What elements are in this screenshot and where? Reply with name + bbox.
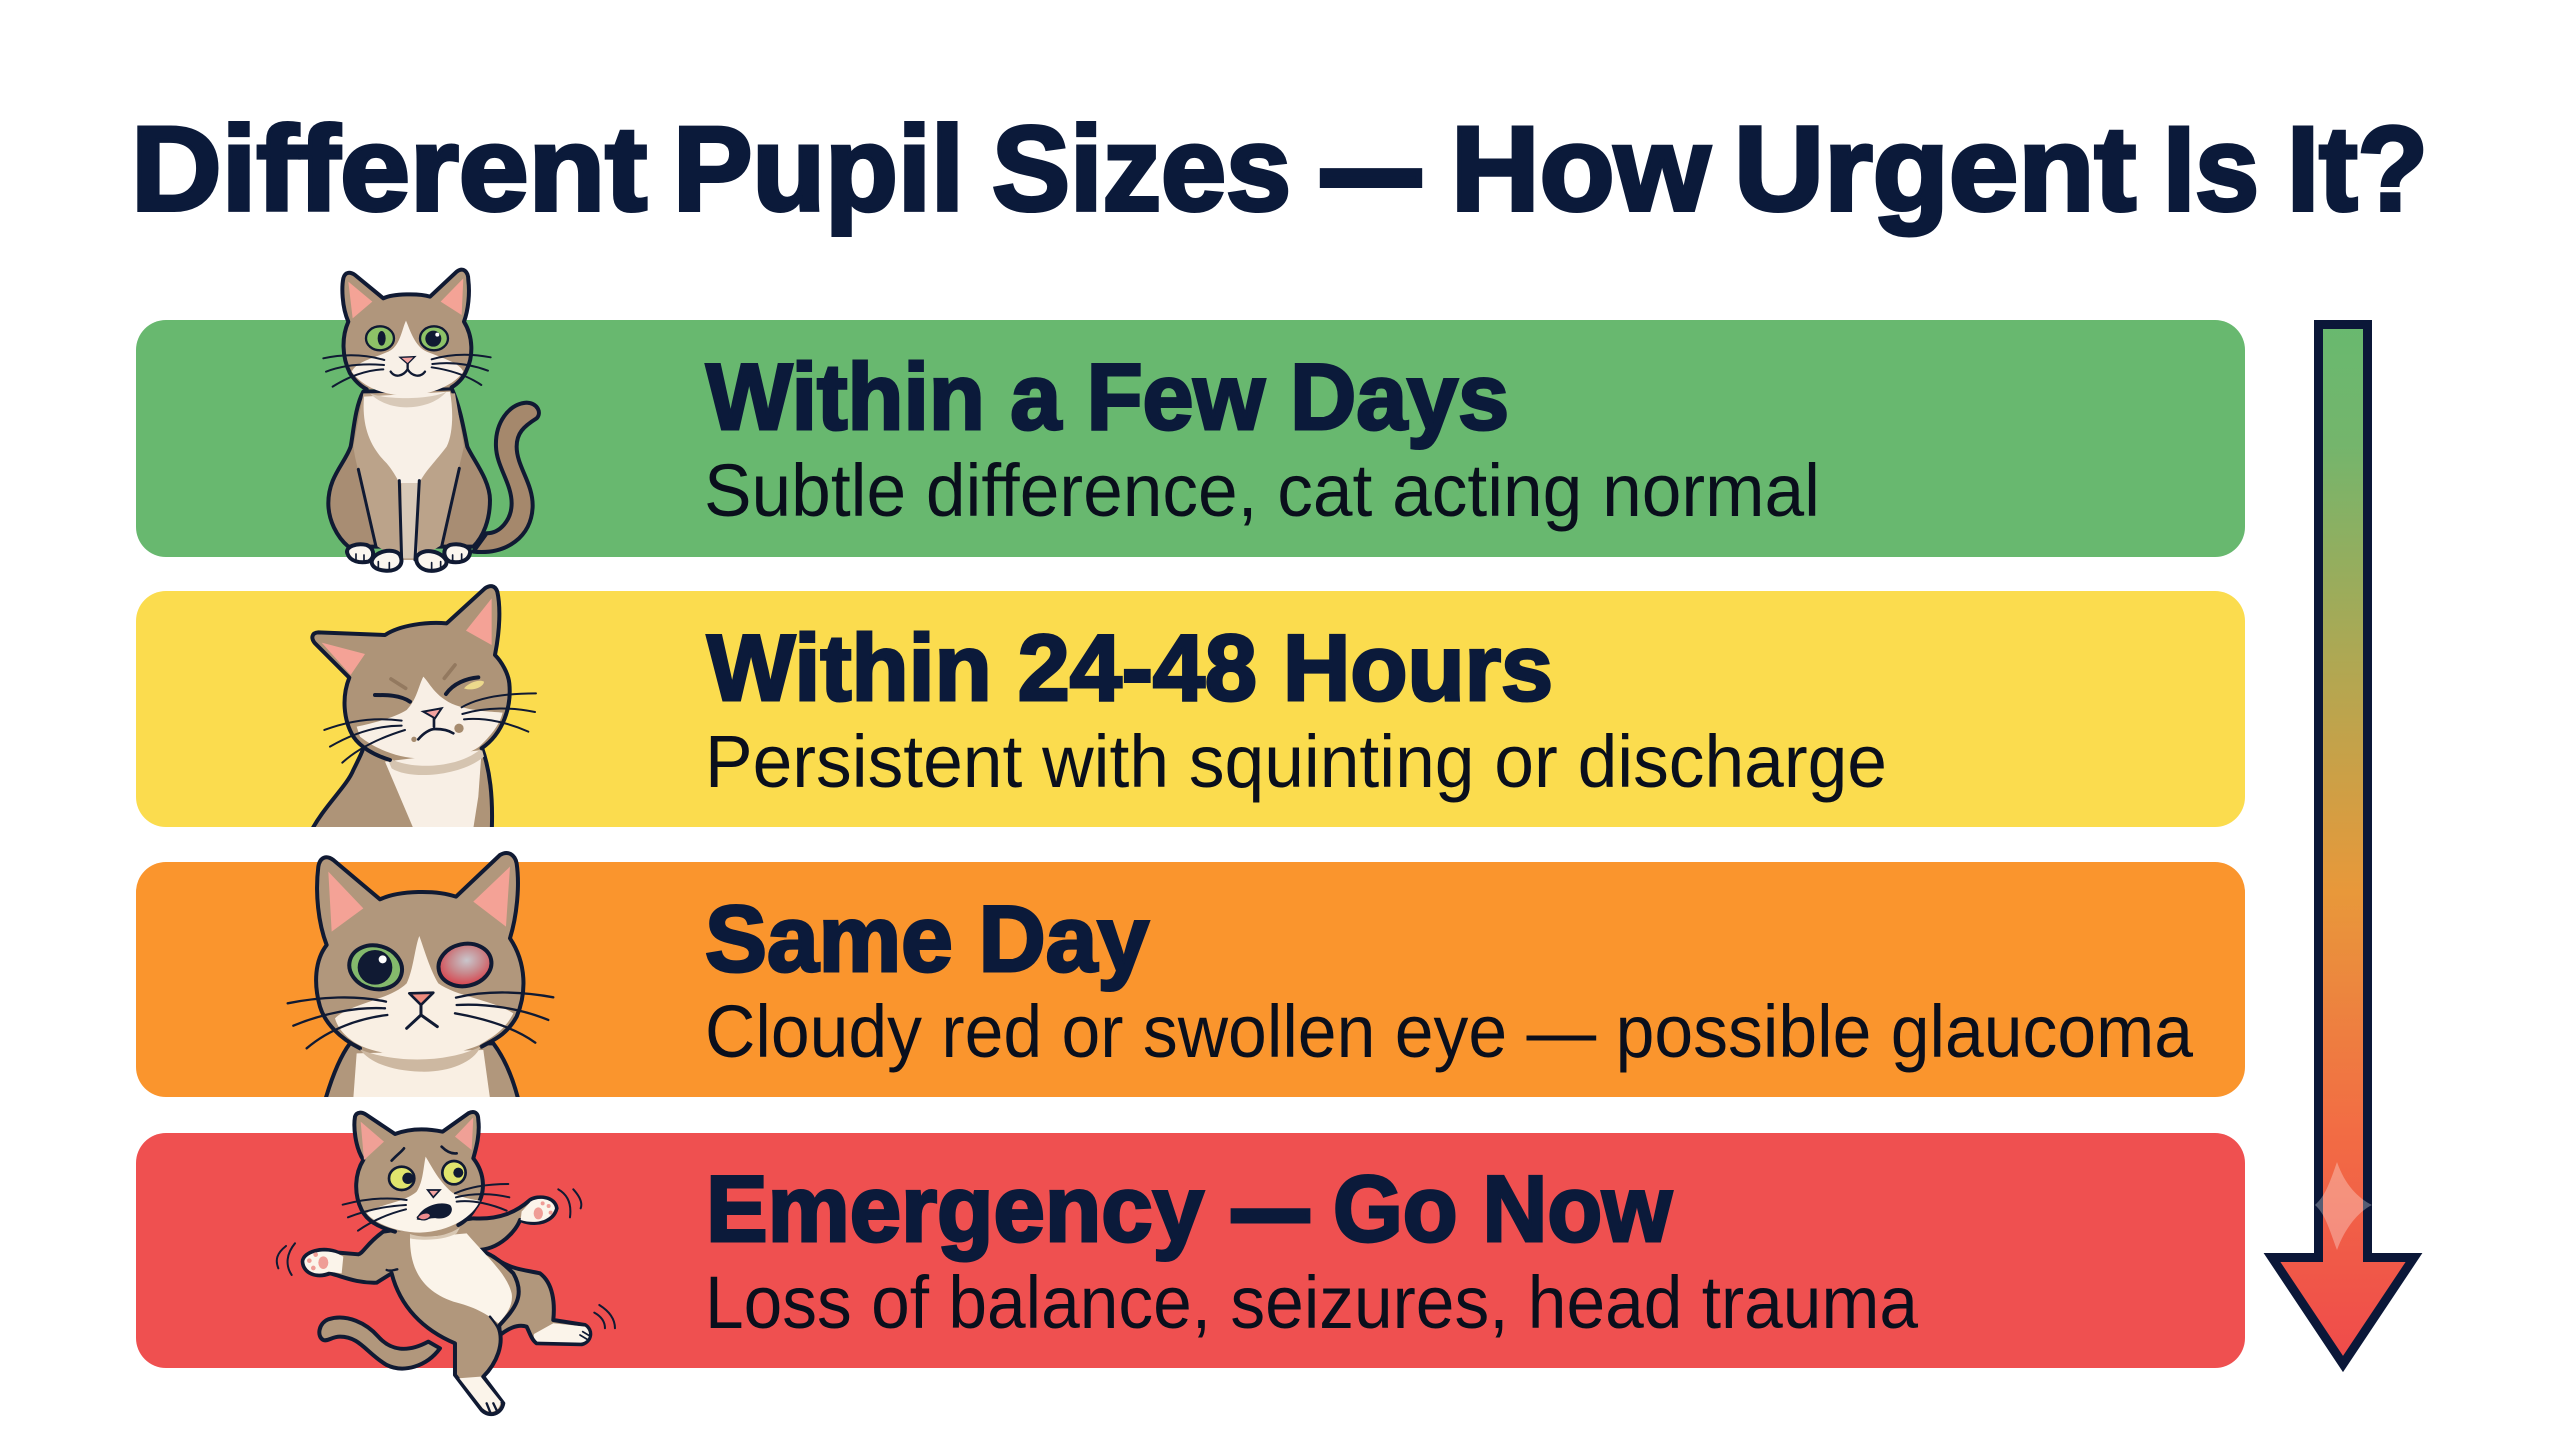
title: It? — [2287, 102, 2428, 236]
icon: falling off-balance cat — [277, 1112, 615, 1414]
text: loss of balance: Loss of balance, seizures, head trauma — [705, 1261, 1919, 1344]
heading: emergency: Emergency — [706, 1156, 1204, 1261]
panel: within a few days — [136, 320, 2245, 557]
panel: same day — [136, 862, 2245, 1097]
icon: sparkle watermark — [2315, 1162, 2372, 1250]
heading: emergency: — — [1233, 1156, 1308, 1261]
heading: same day: Same Day — [705, 886, 1149, 991]
title: How — [1451, 102, 1711, 236]
heading: within 24-48 hours: Within 24-48 Hours — [707, 615, 1553, 720]
text: cloudy red: Cloudy red or swollen eye — possible glaucoma — [705, 990, 2194, 1073]
panel: emergency — [136, 1133, 2245, 1368]
title: Is — [2163, 102, 2259, 236]
heading: within a few days: Within a Few Days — [706, 344, 1509, 449]
arrow: urgency gradient arrow — [2272, 324, 2414, 1364]
title: Pupil — [673, 102, 964, 236]
icon: squinting cat — [310, 586, 536, 833]
title: Sizes — [992, 102, 1291, 236]
title — [131, 102, 2428, 236]
text: persistent: Persistent with squinting or discharge — [705, 720, 1887, 803]
title: — — [1323, 102, 1419, 236]
heading: emergency: Go Now — [1333, 1156, 1673, 1261]
title: Urgent — [1734, 102, 2136, 236]
heading: emergency — [706, 1156, 1673, 1261]
title: Different — [131, 102, 647, 236]
panel: within 24-48 hours — [136, 591, 2245, 827]
icon: sitting cat with green eyes — [323, 270, 539, 571]
icon: cat with cloudy red eye — [288, 853, 553, 1107]
text: subtle difference: Subtle difference, cat acting normal — [704, 449, 1820, 532]
